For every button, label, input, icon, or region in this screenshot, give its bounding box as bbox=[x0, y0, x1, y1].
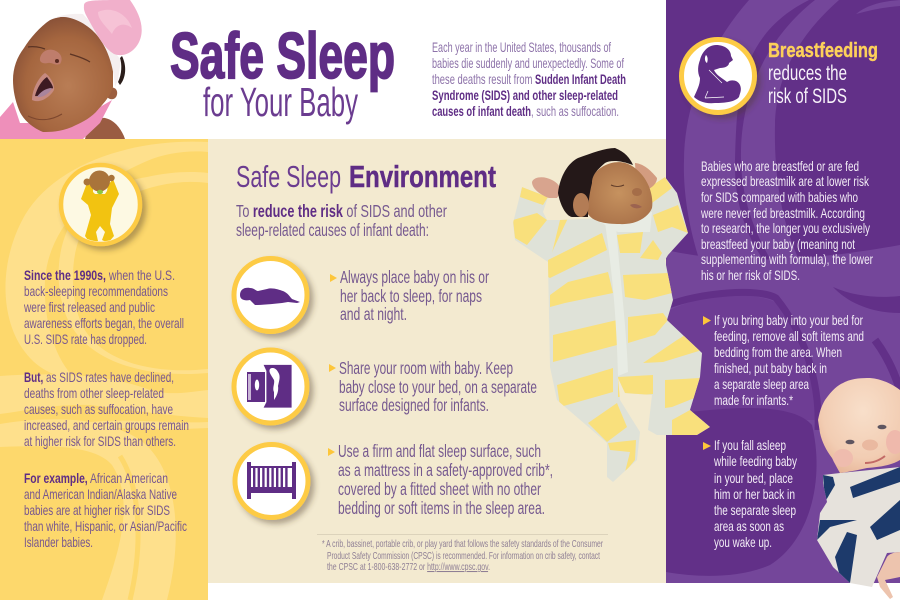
text block: reduce the risk intro bbox=[236, 201, 447, 240]
bullet: firm flat sleep surface bbox=[328, 441, 553, 518]
text block: SIDS history: than white, Hispanic, or Asian/Pacific bbox=[24, 518, 187, 534]
text block: breastfeeding benefits bbox=[700, 158, 873, 283]
icon: breastfeeding mother and baby bbox=[682, 40, 754, 112]
footnote: Product Safety Commission (CPSC) is recommended. For information on crib safety, contact bbox=[327, 550, 600, 562]
bullet: falling asleep while feeding bbox=[703, 437, 797, 550]
photo: yawning baby with pink flower headband bbox=[0, 0, 142, 139]
title: Safe Sleep bbox=[170, 19, 395, 92]
bullet: share your room: baby close to your bed, on a separate bbox=[339, 377, 537, 397]
intro text block: babies die suddenly and unexpectedly. Some of bbox=[432, 55, 624, 71]
text block: SIDS history: Since the 1990s, when the U.S. bbox=[24, 267, 175, 283]
icon: baby sleeping on back bbox=[234, 258, 307, 332]
bullet: falling asleep while feeding: If you fall asleep bbox=[714, 437, 786, 453]
text block: SIDS history: But, as SIDS rates have declined, bbox=[24, 369, 174, 385]
heading: Safe Sleep Environment bbox=[236, 159, 496, 194]
text block: SIDS history: awareness efforts began, the overall bbox=[24, 315, 184, 331]
text block: SIDS history: For example, African American bbox=[24, 470, 168, 486]
icon: crib bbox=[235, 444, 308, 518]
text block: SIDS history: U.S. SIDS rate has dropped. bbox=[24, 331, 147, 347]
bullet: bringing baby into your bed: finished, put baby back in bbox=[714, 360, 827, 376]
footnote: * A crib, bassinet, portable crib, or play yard that follows the safety standards of the Consumer bbox=[322, 538, 603, 550]
bullet: falling asleep while feeding: in your bed, place bbox=[714, 470, 793, 486]
heading: Breastfeeding reduces the risk of SIDS: risk of SIDS bbox=[768, 85, 847, 108]
bullet: falling asleep while feeding: while feeding baby bbox=[713, 453, 797, 469]
bullet: bringing baby into your bed: a separate sleep area bbox=[714, 376, 809, 392]
text block: reduce the risk intro: To reduce the risk of SIDS and other bbox=[236, 201, 447, 221]
photo: smiling baby in navy striped shirt bbox=[810, 378, 900, 599]
bullet: falling asleep while feeding: the separate sleep bbox=[714, 502, 796, 518]
bullet: falling asleep while feeding: area as soon as bbox=[714, 518, 784, 534]
icon: shared room bed and bassinet bbox=[234, 350, 307, 423]
text block: breastfeeding benefits: his or her risk of SIDS. bbox=[701, 267, 800, 283]
bullet: firm flat sleep surface: as a mattress in a safety-approved crib*, bbox=[338, 460, 553, 480]
intro text block: Each year in the United States, thousands of bbox=[432, 39, 611, 55]
text block: SIDS history: deaths from other sleep-related bbox=[24, 385, 164, 401]
panel: yellow sidebar background bbox=[0, 139, 208, 600]
intro text block: Syndrome (SIDS) and other sleep-related bbox=[432, 87, 618, 103]
icon: back-sleeping baby in circle bbox=[61, 165, 140, 244]
intro text block bbox=[432, 39, 626, 119]
intro text block: these deaths result from Sudden Infant Death bbox=[432, 71, 626, 87]
bullet: firm flat sleep surface: Use a firm and flat sleep surface, such bbox=[338, 441, 541, 461]
text block: SIDS history bbox=[23, 267, 189, 550]
heading: Breastfeeding reduces the risk of SIDS: Breastfeeding bbox=[768, 40, 878, 62]
heading: Safe Sleep Environment: Environment bbox=[349, 159, 496, 194]
bullet: bringing baby into your bed bbox=[703, 312, 864, 408]
text block: SIDS history: increased, and certain groups remain bbox=[24, 417, 189, 433]
footnote bbox=[317, 534, 608, 573]
text block: SIDS history: causes, such as suffocation, have bbox=[24, 401, 173, 417]
bullet: share your room: Share your room with baby. Keep bbox=[339, 358, 513, 378]
panel: cream safe sleep environment background bbox=[208, 139, 666, 583]
photo: sleeping baby in striped sleeper bbox=[513, 148, 710, 482]
bullet: back to sleep: Always place baby on his or bbox=[340, 267, 489, 287]
text block: SIDS history: at higher risk for SIDS than others. bbox=[24, 433, 176, 449]
bullet: back to sleep bbox=[330, 267, 489, 324]
title bbox=[170, 19, 395, 125]
bullet: back to sleep: and at night. bbox=[340, 304, 407, 324]
text block: SIDS history: were first released and public bbox=[23, 299, 155, 315]
heading: Breastfeeding reduces the risk of SIDS: reduces the bbox=[768, 62, 847, 85]
bullet: falling asleep while feeding: you wake up. bbox=[714, 534, 772, 550]
bullet: falling asleep while feeding: him or her back in bbox=[714, 486, 795, 502]
text block: SIDS history: and American Indian/Alaska Native bbox=[24, 486, 177, 502]
bullet: firm flat sleep surface: bedding or soft items in the sleep area. bbox=[338, 498, 545, 518]
bullet: firm flat sleep surface: covered by a fitted sheet with no other bbox=[338, 479, 541, 499]
text block: SIDS history: back-sleeping recommendations bbox=[24, 283, 168, 299]
title: for Your Baby bbox=[203, 79, 358, 125]
text block: reduce the risk intro: sleep-related causes of infant death: bbox=[236, 220, 429, 240]
heading: Breastfeeding reduces the risk of SIDS bbox=[768, 40, 878, 108]
bullet: share your room bbox=[329, 358, 537, 415]
bullet: bringing baby into your bed: made for infants.* bbox=[714, 392, 793, 408]
bullet: back to sleep: her back to sleep, for naps bbox=[340, 286, 482, 306]
panel: purple breastfeeding background bbox=[666, 0, 900, 583]
footnote: the CPSC at 1-800-638-2772 or http://www.cpsc.gov. bbox=[327, 561, 490, 573]
text block: SIDS history: babies are at higher risk for SIDS bbox=[24, 502, 170, 518]
heading: Safe Sleep Environment: Safe Sleep bbox=[236, 159, 341, 194]
bullet: share your room: surface designed for infants. bbox=[339, 395, 489, 415]
bullet: bringing baby into your bed: bedding from the area. When bbox=[714, 344, 842, 360]
intro text block: causes of infant death, such as suffocation. bbox=[432, 103, 619, 119]
text block: SIDS history: Islander babies. bbox=[24, 534, 93, 550]
